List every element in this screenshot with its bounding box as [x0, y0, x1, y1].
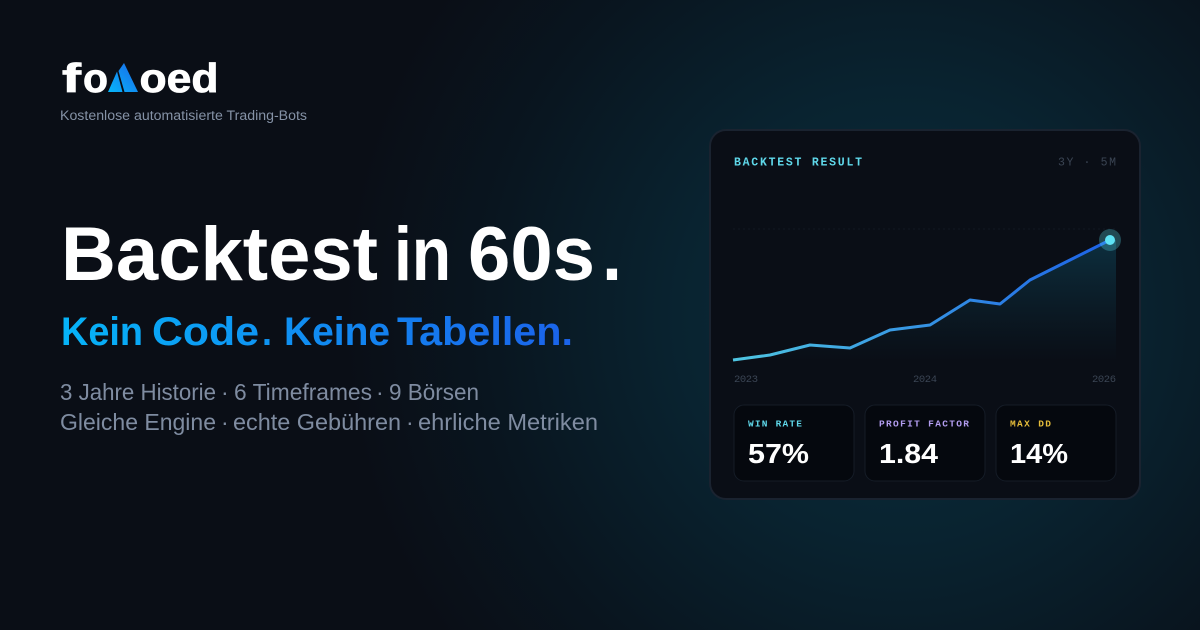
x axis labels: [734, 374, 1116, 386]
x axis labels: 2024: [913, 374, 937, 386]
metric: max drawdown: MAX DD: [1010, 418, 1051, 430]
feature list: Gleiche Engine: [60, 409, 216, 435]
icon: logo triangle mark: [108, 63, 138, 92]
feature list: ·: [221, 409, 229, 435]
subheadline: Code: [152, 310, 259, 354]
logo wordmark: f: [62, 55, 81, 101]
logo wordmark: oed: [140, 55, 218, 101]
subheadline: Keine: [284, 310, 390, 354]
feature list: echte Gebühren: [233, 409, 401, 435]
period label: 3Y · 5M: [1058, 156, 1116, 170]
metric: profit factor: [865, 405, 985, 481]
subheadline: .: [262, 310, 272, 354]
tagline: Kostenlose automatisierte Trading-Bots: [60, 108, 307, 123]
line chart: [733, 229, 1121, 362]
metric: win rate: WIN RATE: [748, 418, 802, 430]
metric: max drawdown: 14%: [1010, 438, 1068, 469]
feature list: ehrliche Metriken: [418, 409, 598, 435]
feature list: ·: [376, 379, 384, 405]
logo wordmark: o: [83, 55, 108, 101]
feature list: ·: [406, 409, 414, 435]
headline: .: [602, 212, 622, 297]
feature list: [60, 379, 598, 435]
logo wordmark: [62, 55, 218, 101]
metric: win rate: [734, 405, 854, 481]
metric: win rate: 57%: [748, 438, 809, 469]
feature list: 6 Timeframes: [234, 379, 372, 405]
x axis labels: 2023: [734, 374, 758, 386]
chart end point: [1099, 229, 1121, 251]
panel: backtest result card: [710, 130, 1140, 499]
subheadline: [61, 310, 573, 354]
feature list: 9 Börsen: [389, 379, 479, 405]
subheadline: Tabellen.: [397, 310, 573, 354]
metric: profit factor: 1.84: [879, 438, 938, 469]
x axis labels: 2026: [1092, 374, 1116, 386]
headline: 60s: [468, 212, 595, 297]
headline: in: [394, 212, 451, 297]
feature list: 3 Jahre Historie: [60, 379, 216, 405]
metric: max drawdown: [996, 405, 1116, 481]
headline: Backtest: [61, 212, 378, 297]
feature list: ·: [221, 379, 229, 405]
metric: profit factor: PROFIT FACTOR: [879, 418, 969, 430]
card title: BACKTEST RESULT: [734, 156, 862, 170]
headline: [61, 212, 622, 297]
subheadline: Kein: [61, 310, 143, 354]
